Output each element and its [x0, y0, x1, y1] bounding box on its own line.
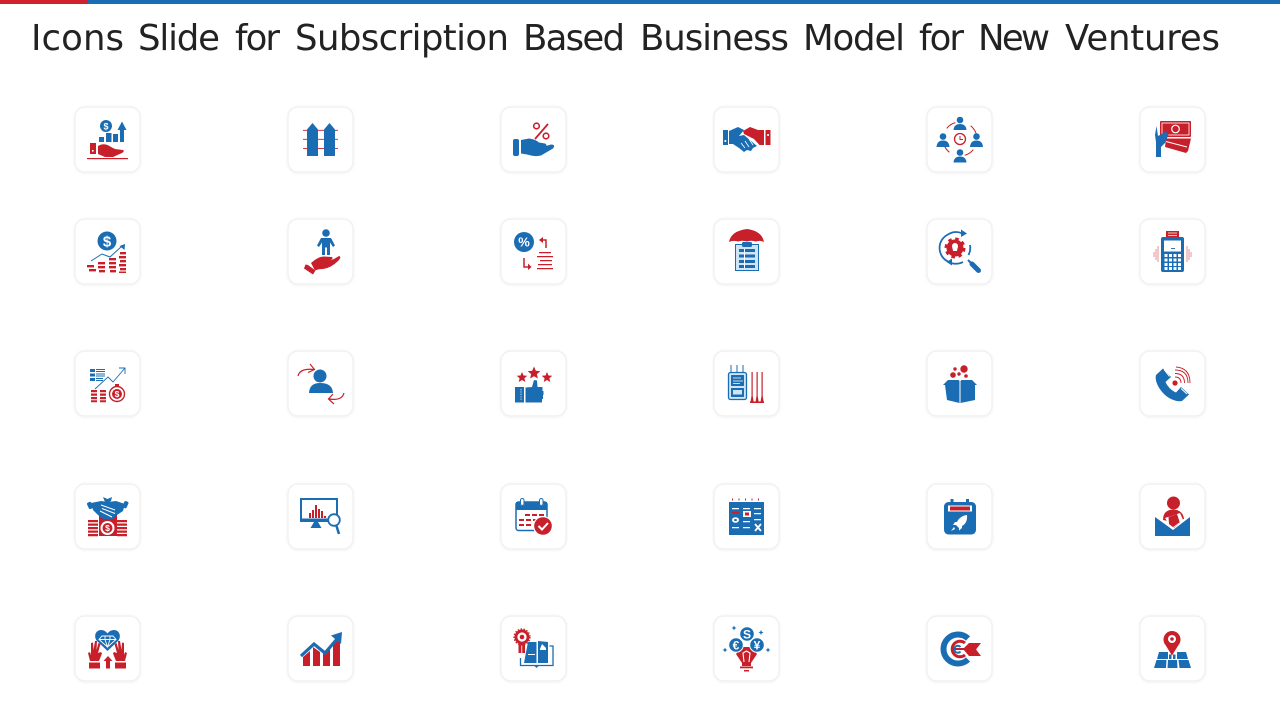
icon: award and book: [501, 616, 566, 681]
title: Based: [523, 18, 625, 59]
icon: finance timing: $: [115, 389, 120, 399]
title: New: [978, 18, 1050, 59]
icon: percent on hand: [501, 107, 566, 172]
icon: team around clock: [927, 107, 992, 172]
icon: fence: [288, 107, 353, 172]
icon: target with arrow: [927, 616, 992, 681]
icon: handshake: [714, 107, 779, 172]
icon: currency idea bulb: €: [733, 638, 740, 652]
icon: calendar launch rocket: [927, 484, 992, 549]
icon: person with mail: [1140, 484, 1205, 549]
icon: customer exchange: [288, 351, 353, 416]
title: for: [919, 18, 964, 59]
icon: gear search: [927, 219, 992, 284]
icon: coin growth chart: $: [103, 234, 112, 250]
title: Icons: [31, 18, 124, 59]
icon: open box: [927, 351, 992, 416]
icon: deal and money: [75, 484, 140, 549]
icon: growth on hand: [75, 107, 140, 172]
title: Model: [803, 18, 905, 59]
icon: growth on hand: $: [103, 122, 109, 132]
icon: network tester and antennas: [714, 351, 779, 416]
icon: card payment terminal: [1140, 219, 1205, 284]
icon: heart diamond in hands: [75, 616, 140, 681]
icon: currency idea bulb: ¥: [754, 638, 761, 652]
icon: insurance umbrella clipboard: [714, 219, 779, 284]
icon: finance timing: [75, 351, 140, 416]
title: Subscription: [295, 18, 509, 59]
icon: person on hand: [288, 219, 353, 284]
icon: deal and money: $: [105, 523, 110, 533]
title: Slide: [138, 18, 220, 59]
icon: percent and stack exchange: [501, 219, 566, 284]
icon: monitor analytics: [288, 484, 353, 549]
title: Ventures: [1065, 18, 1220, 59]
icon: planner board: [714, 484, 779, 549]
icon: stars and thumbs up: [501, 351, 566, 416]
icon: calendar check: [501, 484, 566, 549]
top accent bar: [0, 0, 1280, 4]
title: for: [235, 18, 280, 59]
icon: percent and stack exchange: %: [518, 234, 530, 250]
icon: map location pin: [1140, 616, 1205, 681]
icon: currency idea bulb: S: [743, 628, 751, 642]
icon: phone with signal: [1140, 351, 1205, 416]
title: Business: [640, 18, 789, 59]
icon: currency idea bulb: [714, 616, 779, 681]
icon: coin growth chart: [75, 219, 140, 284]
icon: growth bar chart: [288, 616, 353, 681]
icon: hand holding cash: [1140, 107, 1205, 172]
